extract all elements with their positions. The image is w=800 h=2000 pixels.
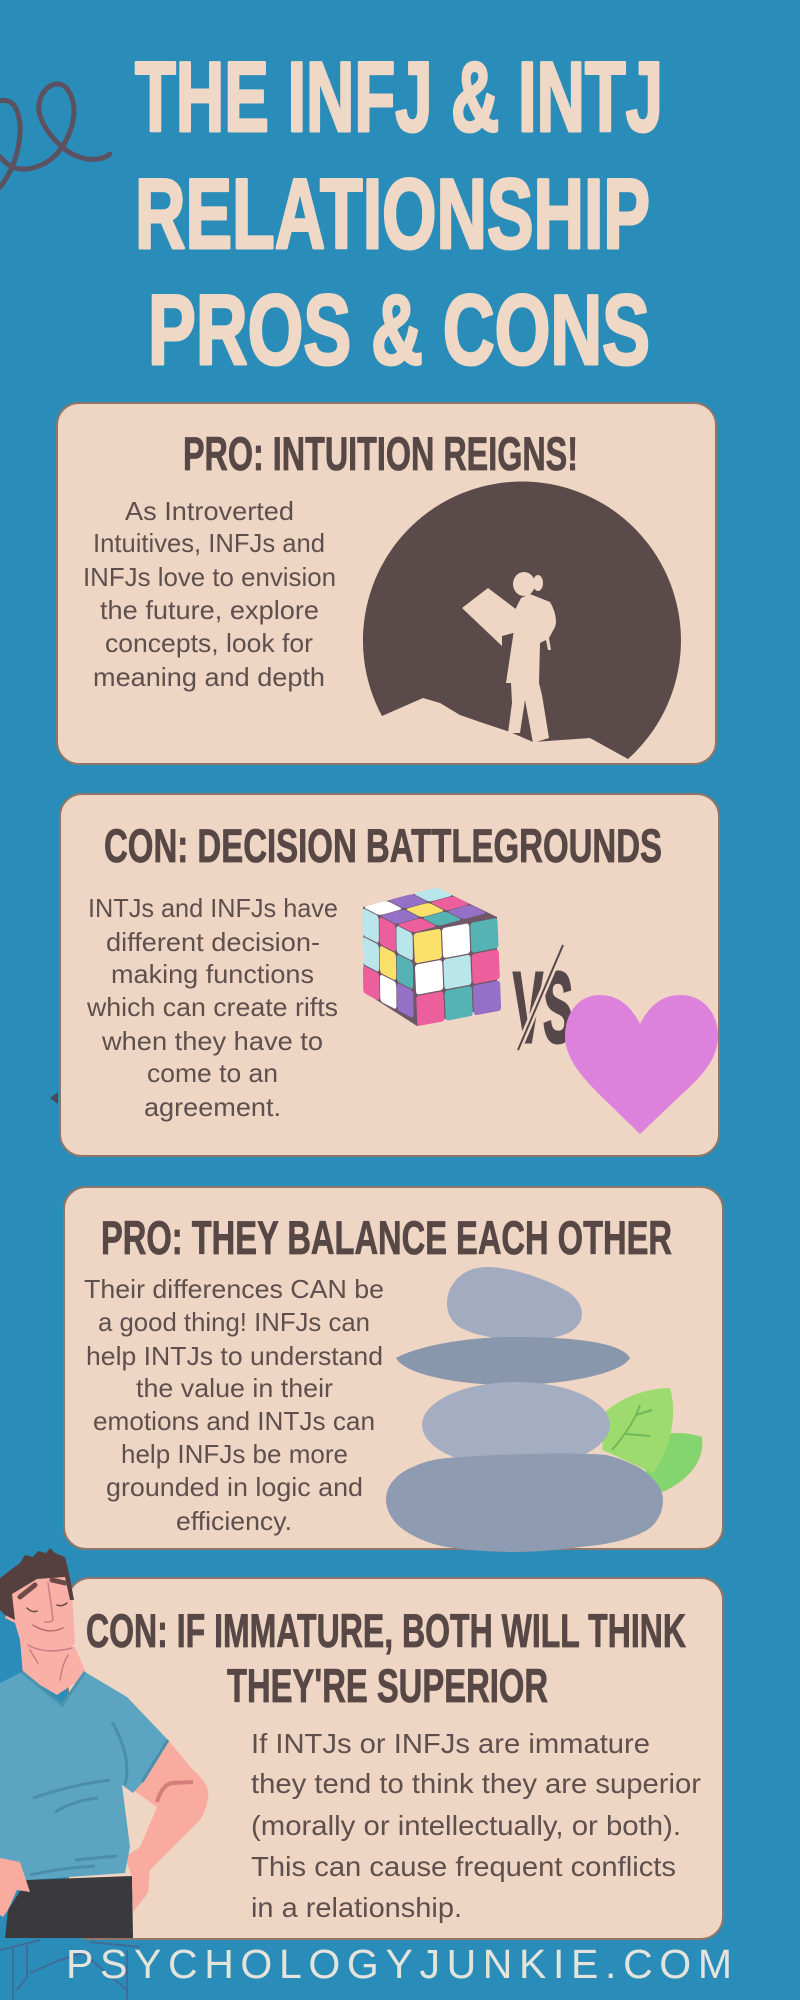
- right arm: [125, 1740, 208, 1912]
- icon: versus mark: [513, 945, 573, 1064]
- text: immature body: If INTJs or INFJs are immature: [251, 1728, 650, 1759]
- text: immature body: they tend to think they are superior: [251, 1768, 701, 1799]
- text: intuition body: Intuitives, INFJs and: [93, 528, 325, 558]
- panel: con decision battlegrounds: VS: [513, 952, 573, 1064]
- text: decision body: INTJs and INFJs have: [88, 893, 338, 923]
- small dark mark at card edge: [50, 1092, 58, 1104]
- icon: leaves: [602, 1388, 702, 1492]
- text: immature body: (morally or intellectually, or both).: [251, 1810, 681, 1841]
- text: immature body: This can cause frequent conflicts: [251, 1851, 676, 1882]
- text: immature body: in a relationship.: [251, 1892, 462, 1923]
- heading: con immature: [86, 1604, 686, 1712]
- icon: hiker silhouette in circle: [363, 482, 681, 759]
- text: intuition body: INFJs love to envision: [83, 562, 336, 592]
- text: intuition body: concepts, look for: [105, 628, 313, 658]
- text: intuition body: the future, explore: [100, 595, 319, 625]
- hair: [0, 1548, 74, 1620]
- title: [135, 41, 663, 385]
- heading: pro intuition: PRO: INTUITION REIGNS!: [183, 427, 578, 480]
- text: decision body: which can create rifts: [86, 992, 338, 1022]
- footer website: PSYCHOLOGYJUNKIE.COM: [66, 1941, 732, 1987]
- text: decision body: [86, 893, 338, 1122]
- panel: pro intuition reigns: [57, 403, 716, 764]
- text: intuition body: meaning and depth: [93, 662, 325, 692]
- text: immature body: [251, 1728, 701, 1923]
- text: decision body: when they have to: [101, 1026, 323, 1056]
- panel: con if immature: [68, 1578, 723, 1939]
- text: balance body: emotions and INTJs can: [93, 1406, 375, 1436]
- text: balance body: grounded in logic and: [106, 1472, 363, 1502]
- panel: con decision battlegrounds: [60, 794, 719, 1156]
- text: decision body: agreement.: [144, 1092, 281, 1122]
- face details: [20, 1580, 72, 1680]
- icon: rubik's cube: [362, 887, 501, 1026]
- decorative squiggle: [0, 84, 110, 189]
- icon: heart: [565, 995, 718, 1134]
- head: [5, 1575, 75, 1653]
- text: balance body: help INFJs be more: [121, 1439, 348, 1469]
- illustration: smiling man: [0, 1548, 208, 2000]
- text: balance body: Their differences CAN be: [84, 1274, 384, 1304]
- text: balance body: help INTJs to understand: [86, 1341, 383, 1371]
- text: decision body: making functions: [111, 959, 314, 989]
- text: balance body: a good thing! INFJs can: [98, 1307, 370, 1337]
- text: decision body: come to an: [147, 1058, 278, 1088]
- heading: con immature: THEY'RE SUPERIOR: [227, 1659, 548, 1712]
- text: balance body: [84, 1274, 384, 1536]
- shirt: [0, 1672, 168, 1880]
- pants: [5, 1876, 133, 1938]
- text: balance body: the value in their: [136, 1373, 333, 1403]
- neck: [20, 1640, 87, 1695]
- left hand: [0, 1858, 30, 1917]
- icon: stacked stones: [386, 1267, 663, 1552]
- text: intuition body: [83, 496, 336, 692]
- text: intuition body: As Introverted: [125, 496, 294, 526]
- text: decision body: different decision-: [106, 927, 320, 957]
- text: balance body: efficiency.: [176, 1506, 292, 1536]
- jeans outline: [0, 1940, 140, 2000]
- panel: pro they balance each other: [64, 1187, 723, 1552]
